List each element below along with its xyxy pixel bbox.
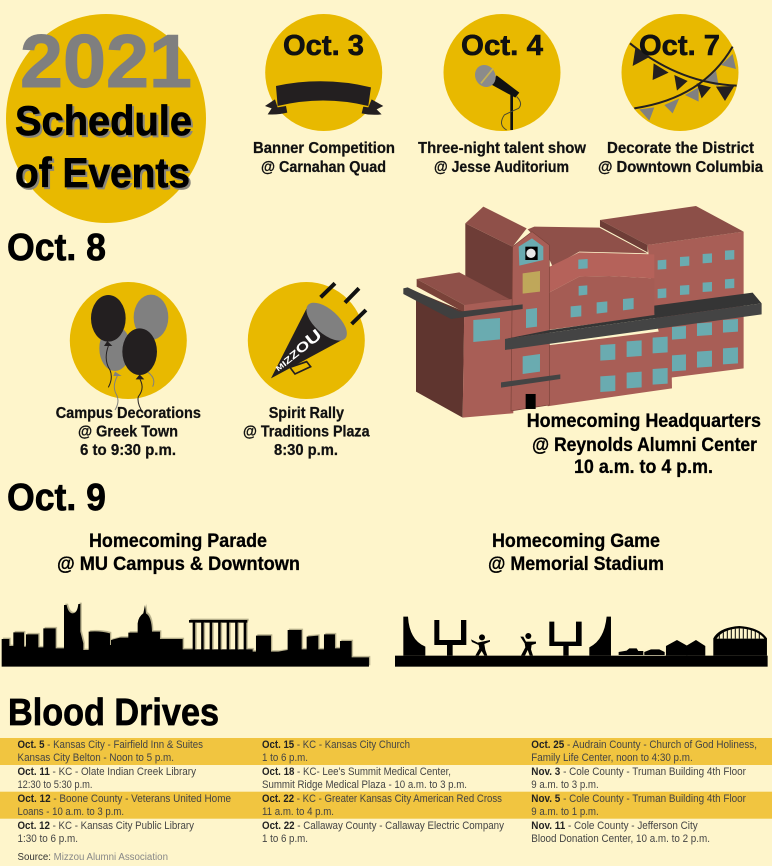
- event: homecoming headquarters: [527, 410, 761, 478]
- column 2: Oct. 22 - KC - Greater Kansas City American Red Cross: [262, 793, 503, 805]
- event: campus decorations: @ Greek Town: [78, 424, 178, 441]
- event: campus decorations: Campus Decorations: [56, 405, 201, 422]
- column 2: 1 to 6 p.m.: [262, 752, 308, 764]
- icon: balloons: [91, 295, 168, 413]
- column 3: Blood Donation Center, 10 a.m. to 2 p.m.: [531, 833, 710, 845]
- event: Oct. 3 banner competition: Oct. 3: [283, 30, 364, 62]
- column 1: Loans - 10 a.m. to 3 p.m.: [18, 806, 124, 818]
- event: spirit rally: [243, 282, 370, 459]
- column 2: Oct. 15 - KC - Kansas City Church: [262, 739, 410, 751]
- event: Oct. 4 talent show: @ Jesse Auditorium: [434, 159, 569, 176]
- icon: bunting: [630, 43, 737, 121]
- event: homecoming parade: @ MU Campus & Downtown: [57, 553, 300, 575]
- table: blood drive schedule: [0, 738, 772, 845]
- column 1: 12:30 to 5:30 p.m.: [18, 779, 92, 791]
- title badge: of Events: [15, 149, 190, 196]
- event: Oct. 7 decorate the district: [598, 14, 763, 176]
- column 2: Oct. 22 - Callaway County - Callaway Electric Company: [262, 820, 505, 832]
- column 1: Oct. 5 - Kansas City - Fairfield Inn & Suites: [18, 739, 204, 751]
- column 2: 11 a.m. to 4 p.m.: [262, 806, 334, 818]
- source note: Source: Mizzou Alumni Association: [18, 852, 168, 863]
- event: Oct. 7 decorate the district: @ Downtown Columbia: [598, 159, 763, 176]
- event: homecoming game: @ Memorial Stadium: [488, 553, 664, 575]
- event: Oct. 4 talent show: Three-night talent show: [418, 140, 587, 157]
- event: Oct. 4 talent show: Oct. 4: [461, 30, 543, 62]
- heading: Blood Drives: Blood Drives: [8, 692, 219, 734]
- heading: Oct. 8: Oct. 8: [7, 227, 106, 269]
- event: Oct. 3 banner competition: [253, 14, 395, 176]
- column 2: Oct. 18 - KC- Lee's Summit Medical Center,: [262, 766, 451, 778]
- illustration: stadium silhouette with players: [395, 617, 768, 667]
- column 2: [262, 739, 505, 845]
- column 3: 9 a.m. to 1 p.m.: [531, 806, 599, 818]
- event: homecoming headquarters: 10 a.m. to 4 p.m.: [574, 456, 713, 478]
- column 1: [18, 739, 231, 845]
- event: homecoming parade: [57, 530, 300, 575]
- event: campus decorations: [56, 282, 201, 459]
- icon: microphone: [471, 61, 521, 130]
- column 1: Oct. 12 - Boone County - Veterans United Home: [18, 793, 231, 805]
- event: spirit rally: Spirit Rally: [269, 405, 344, 422]
- event: campus decorations: 6 to 9:30 p.m.: [80, 442, 176, 459]
- column 3: Oct. 25 - Audrain County - Church of God Holiness,: [531, 739, 757, 751]
- title badge: Schedule: [15, 97, 192, 144]
- column 3: [531, 739, 757, 845]
- event: spirit rally: 8:30 p.m.: [274, 442, 338, 459]
- event: Oct. 3 banner competition: Banner Competition: [253, 140, 395, 157]
- event: spirit rally: @ Traditions Plaza: [243, 424, 370, 441]
- icon: megaphone: MIZZOU: [270, 327, 325, 375]
- illustration: Columbia skyline silhouette: [2, 604, 369, 667]
- event: Oct. 4 talent show: [418, 14, 587, 176]
- icon: banner: [265, 81, 383, 115]
- column 3: Nov. 3 - Cole County - Truman Building 4th Floor: [531, 766, 746, 778]
- column 2: Summit Ridge Medical Plaza - 10 a.m. to 3 p.m.: [262, 779, 467, 791]
- event: homecoming parade: Homecoming Parade: [89, 530, 267, 552]
- column 3: Family Life Center, noon to 4:30 p.m.: [531, 752, 693, 764]
- event: homecoming game: [488, 530, 664, 575]
- heading: Oct. 9: Oct. 9: [7, 477, 106, 519]
- column 2: 1 to 6 p.m.: [262, 833, 308, 845]
- title badge: [6, 14, 206, 223]
- event: homecoming game: Homecoming Game: [492, 530, 660, 552]
- column 1: Kansas City Belton - Noon to 5 p.m.: [18, 752, 174, 764]
- title badge: 2021: [20, 19, 192, 103]
- column 1: 1:30 to 6 p.m.: [18, 833, 78, 845]
- event: Oct. 3 banner competition: @ Carnahan Quad: [261, 159, 386, 176]
- event: Oct. 7 decorate the district: Decorate the District: [607, 140, 755, 157]
- column 3: 9 a.m. to 3 p.m.: [531, 779, 599, 791]
- column 1: Oct. 12 - KC - Kansas City Public Library: [18, 820, 195, 832]
- column 1: Oct. 11 - KC - Olate Indian Creek Library: [18, 766, 197, 778]
- column 3: Nov. 5 - Cole County - Truman Building 4th Floor: [531, 793, 746, 805]
- icon: megaphone: [270, 283, 366, 378]
- column 3: Nov. 11 - Cole County - Jefferson City: [531, 820, 698, 832]
- event: Oct. 7 decorate the district: Oct. 7: [639, 30, 720, 62]
- illustration: Reynolds Alumni Center building: [403, 206, 762, 418]
